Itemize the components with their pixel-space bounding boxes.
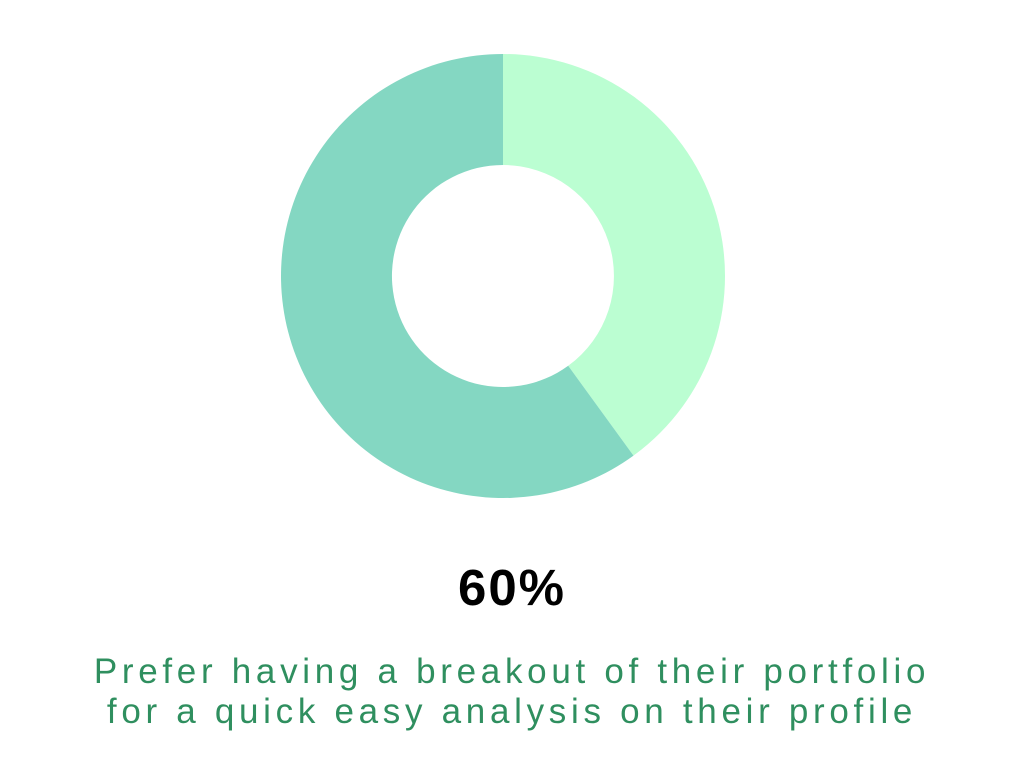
description: for a quick easy analysis on their profile <box>107 692 917 731</box>
description: Prefer having a breakout of their portfolio <box>94 652 930 691</box>
segment: 60% dark <box>281 54 634 498</box>
segment: 40% light <box>503 54 725 456</box>
donut chart <box>281 54 725 498</box>
percentage: 60% <box>458 559 566 616</box>
description <box>94 652 930 731</box>
